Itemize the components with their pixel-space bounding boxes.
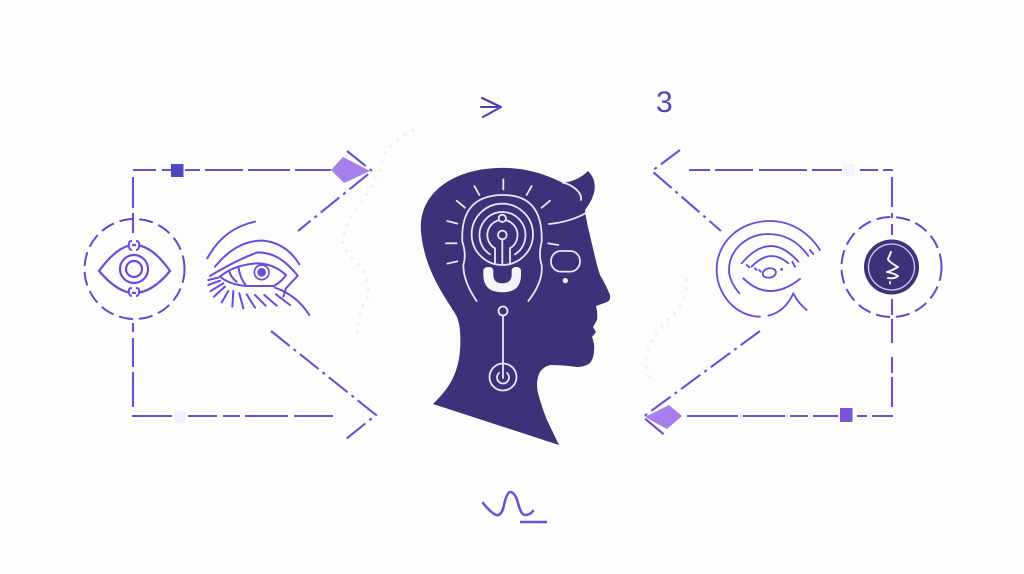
icon: concentric arc eye — [717, 221, 820, 317]
square node: top left — [171, 164, 184, 177]
icon: coin in dashed circle — [842, 217, 942, 317]
arrow glyph at top — [481, 98, 501, 117]
chevron: top right — [652, 150, 721, 231]
dotted wave: left — [343, 130, 413, 337]
neck node line — [490, 306, 516, 390]
icon: eye in dashed circle — [84, 219, 184, 319]
brain circuit lines — [446, 179, 580, 301]
right dashed frame — [687, 164, 893, 422]
chevron: bottom right — [643, 331, 760, 437]
head silhouette with brain diagram — [421, 168, 610, 445]
diamond marker: top left — [331, 157, 370, 183]
icon: detailed eye with lashes — [207, 222, 309, 315]
square node: bottom left — [174, 411, 186, 423]
diamond marker: bottom right — [645, 405, 682, 429]
wave glyph at bottom — [483, 492, 547, 522]
square node: top right — [843, 164, 855, 176]
number 3: 3 — [656, 86, 673, 119]
square node: bottom right — [840, 408, 852, 422]
left dashed frame — [132, 164, 333, 423]
dotted wave: right — [646, 280, 687, 380]
hair lines — [549, 183, 586, 224]
chevron: top left — [298, 151, 372, 231]
chevron: bottom left — [271, 331, 376, 439]
